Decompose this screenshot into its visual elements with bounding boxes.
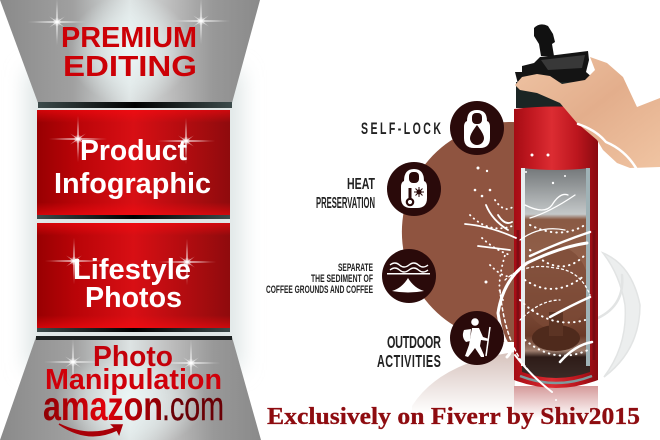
label: heat preservation — [316, 176, 375, 212]
bottle cap — [515, 51, 593, 84]
splash — [465, 124, 636, 392]
lower reflection — [412, 352, 515, 414]
text: photos: Photos — [85, 282, 182, 314]
footer credit: Exclusively on Fiverr by Shiv2015 — [267, 404, 640, 430]
text: infographic: Infographic — [54, 168, 211, 200]
heading: premium: PREMIUM — [61, 22, 197, 54]
panel: product infographic — [37, 110, 230, 219]
text: lifestyle: Lifestyle — [73, 254, 191, 286]
bottle — [514, 24, 598, 418]
coffee press — [523, 246, 589, 351]
label: separate sediment: THE SEDIMENT OF — [311, 273, 373, 285]
bottle neck — [516, 82, 586, 108]
icon: separate sediment — [382, 249, 436, 303]
window edges — [521, 168, 525, 366]
label: separate sediment: COFFEE GROUNDS AND COFFEE — [266, 284, 373, 296]
panel: premium editing — [0, 0, 260, 108]
brown circle — [402, 122, 520, 342]
label: separate sediment: SEPARATE — [338, 262, 373, 274]
label: outdoor activities: OUTDOOR — [387, 334, 441, 353]
water droplets — [474, 154, 566, 401]
bottle body — [514, 106, 598, 388]
panel: photo manipulation amazon — [0, 336, 261, 440]
label: outdoor activities: ACTIVITIES — [377, 353, 441, 372]
logo: amazon.com: .com — [162, 383, 224, 429]
bottle window — [522, 168, 590, 378]
label: outdoor activities — [377, 334, 441, 372]
hand — [515, 57, 660, 168]
left column glow — [26, 70, 242, 370]
bottle reflection — [514, 386, 598, 418]
label: self-lock: SELF-LOCK — [361, 118, 442, 138]
text: photo: Photo — [93, 341, 173, 373]
icon: amazon smile — [59, 424, 122, 436]
bottle spout — [534, 24, 555, 56]
label: heat preservation: HEAT — [347, 176, 375, 193]
icon: hiker — [450, 311, 504, 365]
text: product: Product — [80, 135, 187, 167]
icon: self-lock — [450, 101, 504, 155]
pale splash right — [598, 253, 640, 377]
heading: editing: EDITING — [63, 51, 197, 83]
label: separate sediment — [266, 262, 373, 296]
text: PRESERVATION — [316, 195, 375, 212]
panel: lifestyle photos — [37, 223, 230, 332]
text: manipulation: Manipulation — [45, 364, 222, 396]
icon: heat preservation — [387, 162, 441, 216]
logo: amazon.com: amazon — [43, 383, 163, 429]
